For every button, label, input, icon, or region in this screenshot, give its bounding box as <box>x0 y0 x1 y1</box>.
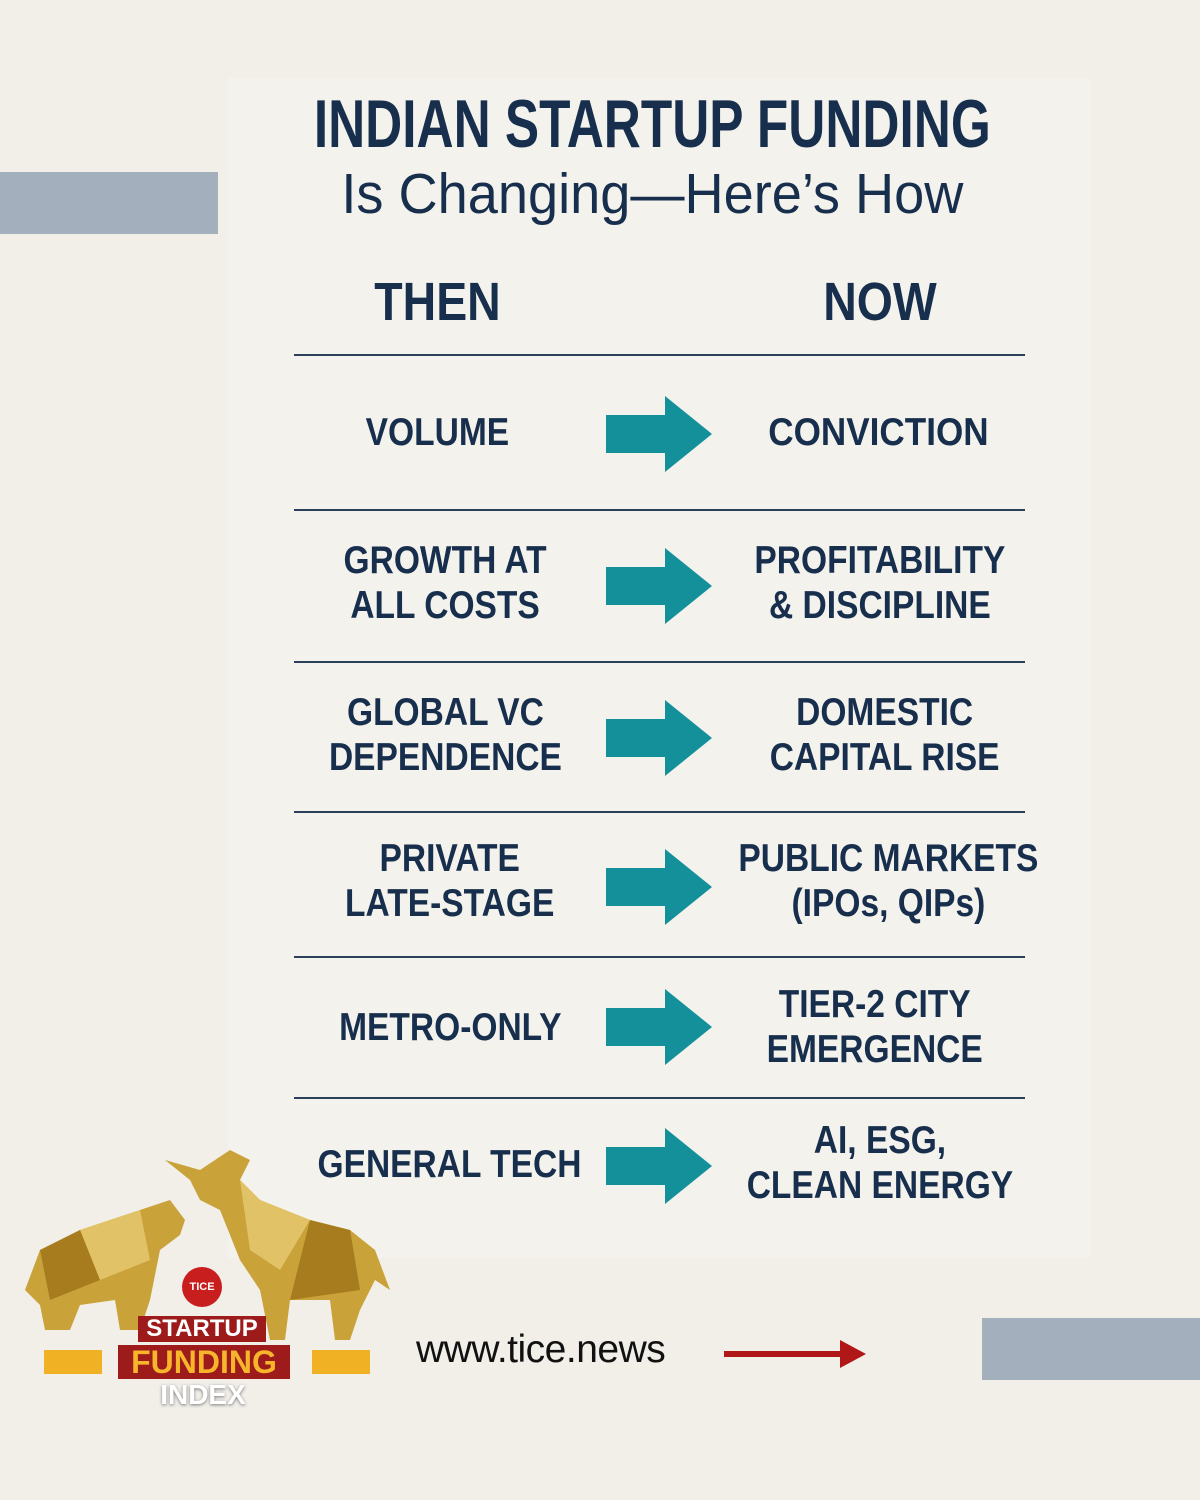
icon: gold bear <box>25 1200 185 1330</box>
row 1: CONVICTION <box>768 411 988 454</box>
logo: startup funding index <box>25 1150 390 1410</box>
arrow: red <box>724 1340 866 1368</box>
decorative bar right <box>982 1318 1200 1380</box>
subtitle: Is Changing—Here’s How <box>341 162 963 226</box>
row 5: EMERGENCE <box>767 1028 983 1071</box>
row 6: AI, ESG, <box>814 1119 946 1162</box>
row 6 <box>317 1119 1013 1207</box>
logo: startup funding index: INDEX <box>160 1379 246 1410</box>
row 6: CLEAN ENERGY <box>747 1164 1013 1207</box>
icon: tice badge <box>182 1267 222 1307</box>
icon: gold bull <box>165 1150 390 1340</box>
row 1: VOLUME <box>365 411 509 454</box>
icon: tice badge: TICE <box>189 1281 215 1293</box>
title: INDIAN STARTUP FUNDING <box>314 86 990 162</box>
row 4 <box>345 837 1038 925</box>
panel background <box>228 78 1090 1258</box>
row 3 <box>329 691 1000 779</box>
row 2 <box>343 539 1005 627</box>
row 5 <box>339 983 983 1071</box>
row 2: & DISCIPLINE <box>769 584 991 627</box>
row 2: GROWTH AT <box>343 539 547 582</box>
row 2: PROFITABILITY <box>755 539 1005 582</box>
website url: www.tice.news <box>416 1328 665 1371</box>
row 4: LATE-STAGE <box>345 882 555 925</box>
logo: startup funding index: FUNDING <box>131 1344 277 1380</box>
decorative bar left <box>0 172 218 234</box>
row 3: CAPITAL RISE <box>770 736 1000 779</box>
row 6: GENERAL TECH <box>317 1143 581 1186</box>
row 5: METRO-ONLY <box>339 1006 561 1049</box>
row 1 <box>365 396 988 472</box>
row 3: DEPENDENCE <box>329 736 561 779</box>
logo text: STARTUP <box>146 1315 258 1342</box>
heading: then: THEN <box>374 272 500 332</box>
row 5: TIER-2 CITY <box>779 983 971 1026</box>
row 2: ALL COSTS <box>350 584 540 627</box>
row 4: PUBLIC MARKETS <box>738 837 1038 880</box>
row 4: (IPOs, QIPs) <box>791 882 985 925</box>
heading: now: NOW <box>823 272 937 332</box>
row 3: DOMESTIC <box>796 691 974 734</box>
row 3: GLOBAL VC <box>347 691 543 734</box>
row 4: PRIVATE <box>380 837 520 880</box>
